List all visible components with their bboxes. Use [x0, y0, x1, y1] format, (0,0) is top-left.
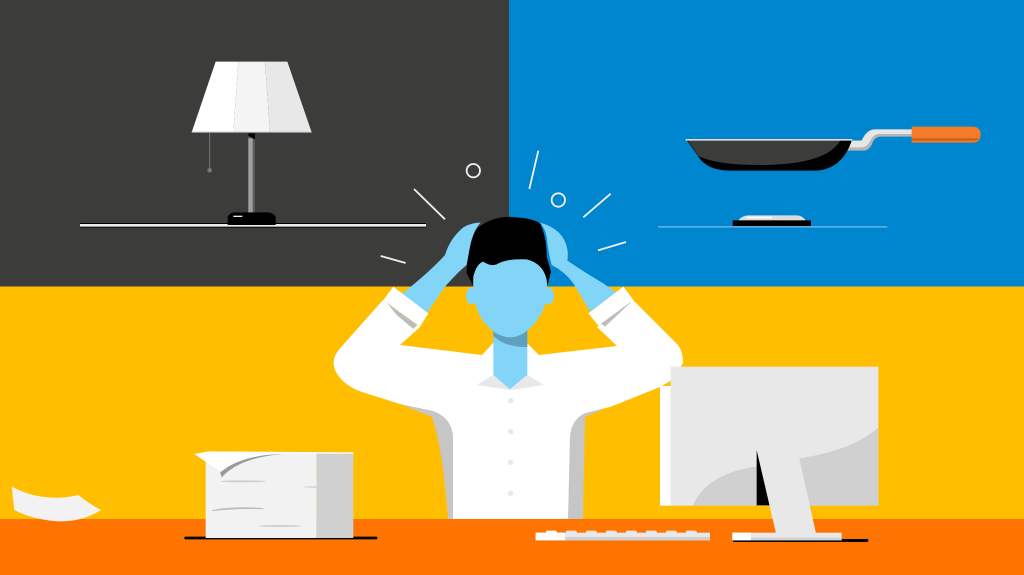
stand shadow — [757, 450, 771, 505]
ears — [466, 288, 554, 304]
burner — [733, 215, 811, 227]
left arm and hand — [402, 223, 481, 313]
figure: stressed man — [334, 217, 683, 519]
icon: keyboard — [536, 531, 710, 540]
panel: blue wall — [509, 0, 1024, 286]
panel: orange desk — [0, 519, 1024, 575]
collar — [477, 375, 544, 390]
icon: table lamp on shelf — [80, 62, 426, 228]
panel: dark wall — [0, 0, 509, 286]
monitor shading — [693, 427, 878, 506]
keyboard body — [536, 533, 710, 540]
pan handle — [847, 127, 981, 151]
pan body — [686, 139, 852, 171]
monitor edge — [660, 386, 671, 506]
curled top sheet — [194, 451, 353, 477]
stack shadow — [184, 537, 377, 539]
shirt — [334, 300, 683, 519]
shirt buttons — [508, 398, 513, 496]
circle — [552, 193, 565, 207]
lamp pole — [248, 133, 255, 213]
icon: computer monitor — [660, 367, 878, 542]
stress marks — [381, 151, 626, 263]
sheet edges — [212, 480, 353, 527]
mark — [414, 189, 445, 219]
stand — [757, 450, 816, 533]
mark — [598, 242, 626, 250]
right arm and hand — [540, 223, 617, 312]
panel: yellow wall — [0, 286, 1024, 520]
lamp base — [228, 212, 276, 225]
left cuff shadow — [387, 303, 417, 329]
stack body — [206, 453, 353, 538]
hair — [467, 217, 551, 286]
left cuff — [383, 287, 428, 327]
shirt shadows — [400, 404, 612, 519]
lamp shade — [192, 62, 312, 133]
right cuff — [588, 287, 633, 326]
circle — [467, 164, 480, 177]
pull chain — [207, 132, 212, 173]
monitor back — [671, 367, 878, 506]
base shadow — [733, 539, 868, 542]
mark — [583, 194, 611, 217]
icon: loose sheet of paper — [12, 487, 101, 521]
right cuff shadow — [601, 302, 632, 327]
shelf line — [80, 223, 426, 228]
stand base — [732, 533, 842, 540]
shelf line — [658, 226, 887, 228]
neck — [493, 330, 527, 389]
icon: paper stack — [184, 451, 377, 539]
keys — [546, 531, 697, 533]
mark — [381, 256, 406, 263]
face — [473, 259, 547, 337]
mark — [529, 151, 538, 189]
icon: frying pan over burner — [658, 127, 981, 228]
